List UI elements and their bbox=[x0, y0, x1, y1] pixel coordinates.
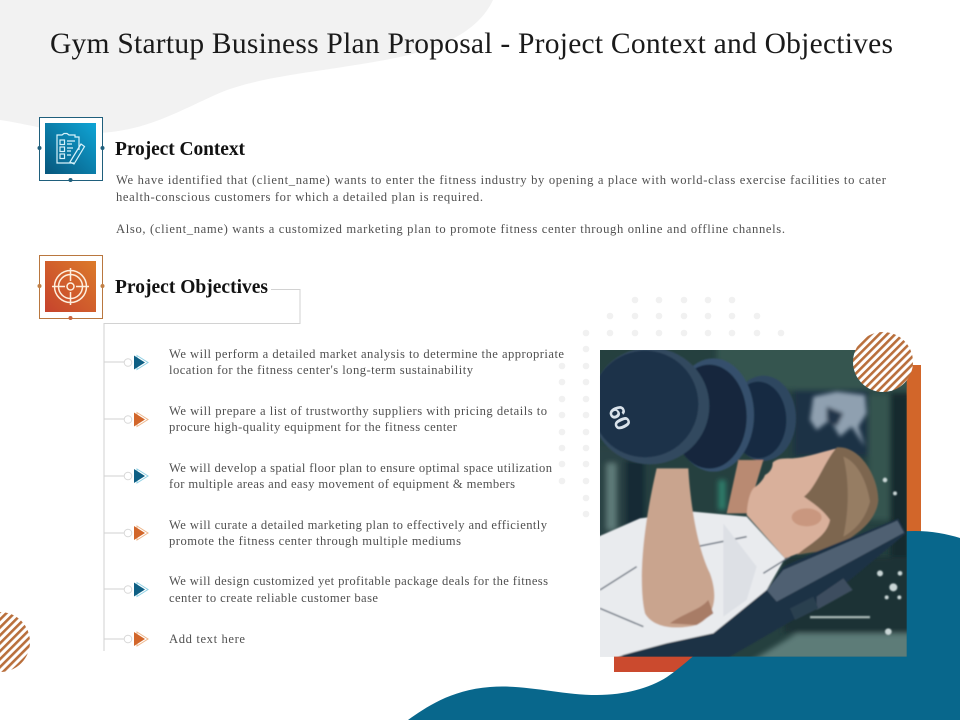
text: objective 3: for multiple areas and easy movement of equipment & members bbox=[169, 477, 515, 491]
icon: project context clipboard bbox=[38, 118, 104, 182]
marker: objective 2 bbox=[124, 412, 148, 426]
text block: project context: Also, (client_name) wants a customized marketing plan to promote fitness center through online and offline channels. bbox=[116, 222, 785, 236]
title: Gym Startup Business Plan Proposal - Project Context and Objectives bbox=[50, 28, 893, 60]
text block: project context: health-conscious customers for which a detailed plan is required. bbox=[116, 190, 483, 204]
shirt bbox=[600, 510, 786, 657]
text: objective 4: We will curate a detailed marketing plan to effectively and efficiently bbox=[169, 518, 548, 532]
second disc bbox=[673, 358, 754, 472]
marker: objective 1 bbox=[124, 356, 148, 370]
text: objective 2 bbox=[169, 404, 547, 434]
text: objective 1 bbox=[169, 347, 564, 377]
photo: man lifting dumbbells bbox=[600, 350, 907, 657]
text: objective 2: procure high-quality equipment for the fitness center bbox=[169, 420, 458, 434]
dumbbell number: 60 bbox=[603, 401, 636, 434]
text: objective 5: center to create reliable customer base bbox=[169, 591, 378, 605]
face and neck bbox=[746, 448, 836, 560]
forearm bbox=[642, 468, 714, 628]
first disc bbox=[591, 348, 709, 464]
text: objective 4: promote the fitness center through multiple mediums bbox=[169, 534, 461, 548]
far arm bbox=[727, 460, 763, 513]
text block: project context bbox=[116, 173, 887, 236]
striped circle top right bbox=[853, 332, 913, 392]
text: objective 1: We will perform a detailed market analysis to determine the appropriate bbox=[169, 347, 564, 361]
text block: project context: We have identified that (client_name) wants to enter the fitness industry by opening a place with world-class exercise facilities to cater bbox=[116, 173, 887, 187]
wall poster highlights bbox=[810, 392, 867, 447]
text: objective 2: We will prepare a list of trustworthy suppliers with pricing details to bbox=[169, 404, 547, 418]
text: objective 6: Add text here bbox=[169, 632, 245, 646]
text: objective 3: We will develop a spatial floor plan to ensure optimal space utilization bbox=[169, 461, 553, 475]
text: objective 4 bbox=[169, 518, 548, 548]
bench bbox=[620, 518, 906, 657]
rack highlights bbox=[877, 478, 902, 635]
bottom teal wave bbox=[408, 531, 960, 720]
marker: objective 6 bbox=[124, 632, 148, 646]
striped circle left edge bbox=[0, 612, 30, 672]
ear bbox=[792, 508, 822, 526]
red accent bar bbox=[614, 655, 699, 672]
marker: objective 3 bbox=[124, 469, 148, 483]
text: objective 5 bbox=[169, 574, 548, 605]
text: objective 5: We will design customized yet profitable package deals for the fitness bbox=[169, 574, 548, 588]
orange accent bar bbox=[905, 365, 921, 535]
heading: project context: Project Context bbox=[115, 139, 246, 160]
timeline connector lines bbox=[104, 290, 300, 651]
top gray background blob bbox=[0, 0, 493, 133]
dot grid decoration bbox=[559, 297, 784, 517]
text: objective 3 bbox=[169, 461, 553, 491]
third disc bbox=[731, 376, 796, 461]
heading: project objectives: Project Objectives bbox=[115, 277, 268, 298]
marker: objective 4 bbox=[124, 526, 148, 540]
icon: project objectives target bbox=[38, 256, 104, 320]
text: objective 1: location for the fitness center's long-term sustainability bbox=[169, 363, 474, 377]
marker: objective 5 bbox=[124, 582, 148, 596]
hair bbox=[797, 447, 878, 555]
